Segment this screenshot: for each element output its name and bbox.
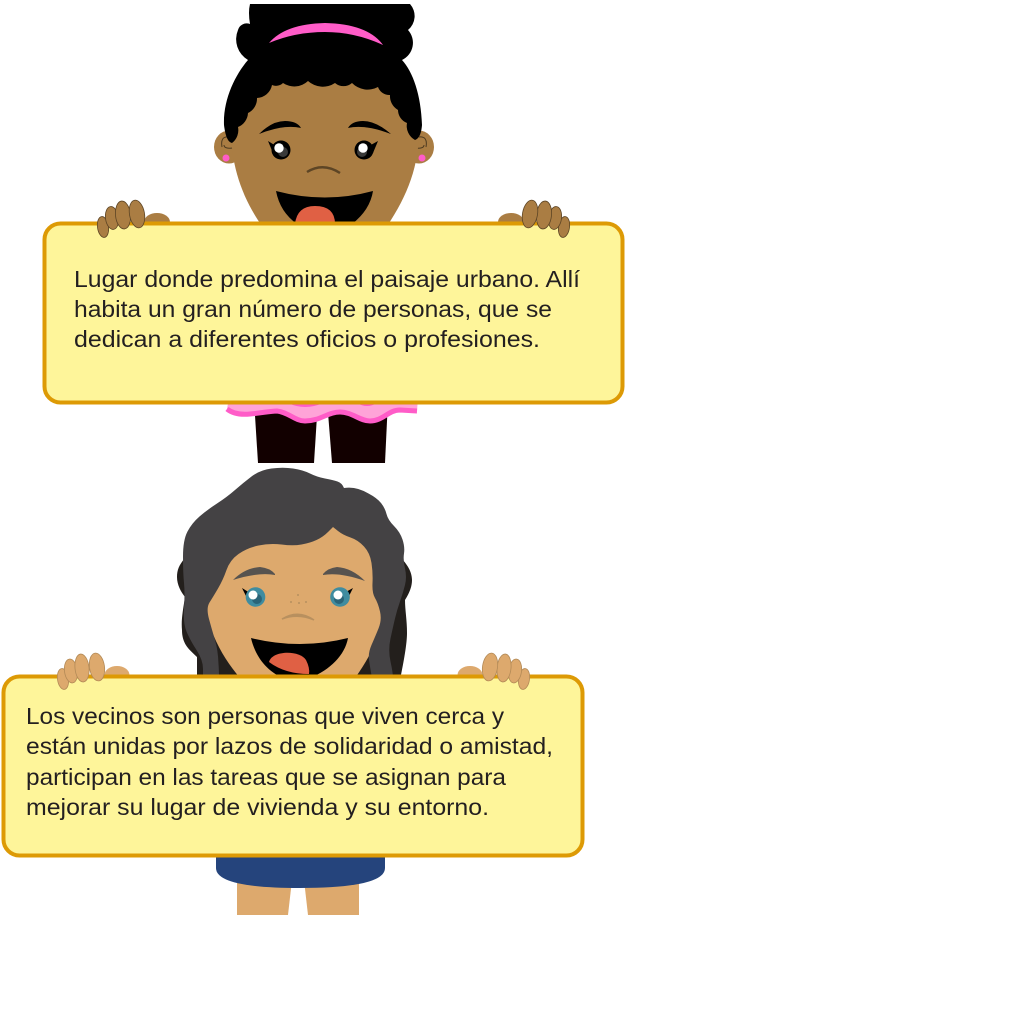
text block: second definition [26,703,553,820]
text block: first definition: Lugar donde predomina el paisaje urbano. Allí [74,266,580,292]
text block: second definition: Los vecinos son personas que viven cerca y [26,703,504,729]
icon: ears with pink earrings [214,130,434,164]
mouth and tongue [276,191,373,224]
face [231,70,419,226]
icon: right hand fingers [481,652,531,690]
skirt: pink ruffle [227,398,418,421]
skirt: blue [216,850,385,888]
icon: right hand fingers [520,199,571,238]
text block: second definition: participan en las tareas que se asignan para [26,764,507,790]
hair: dark back layer [177,540,412,680]
freckles [290,594,307,604]
face [200,520,386,678]
hair: black updo [224,4,422,143]
icon: thumbs [144,213,524,231]
nose [282,614,314,620]
icon: left hand fingers [96,199,147,238]
legs: dark shorts [254,400,388,463]
text block: first definition: habita un gran número de personas, que se [74,296,552,322]
text block: second definition: mejorar su lugar de vivienda y su entorno. [26,794,489,820]
nose [307,167,340,173]
eyes [268,140,378,160]
legs: bare [237,880,359,915]
panel: girl with grey hair and definition of neighbours [4,468,582,915]
text block: first definition [74,266,580,352]
eyebrows [233,567,365,581]
hair: grey front layer [183,468,406,678]
hairband: pink [269,23,383,45]
text block: first definition: dedican a diferentes oficios o profesiones. [74,326,540,352]
sign: second yellow box [4,676,582,856]
panel: girl with black hair and definition of city [44,4,622,463]
eyebrows [259,121,391,134]
text block: second definition: están unidas por lazos de solidaridad o amistad, [26,733,553,759]
sign: first yellow box [44,224,622,402]
icon: left hand fingers [56,652,106,690]
eyes [242,587,353,607]
icon: thumbs [104,666,482,684]
mouth and tongue [251,638,348,678]
